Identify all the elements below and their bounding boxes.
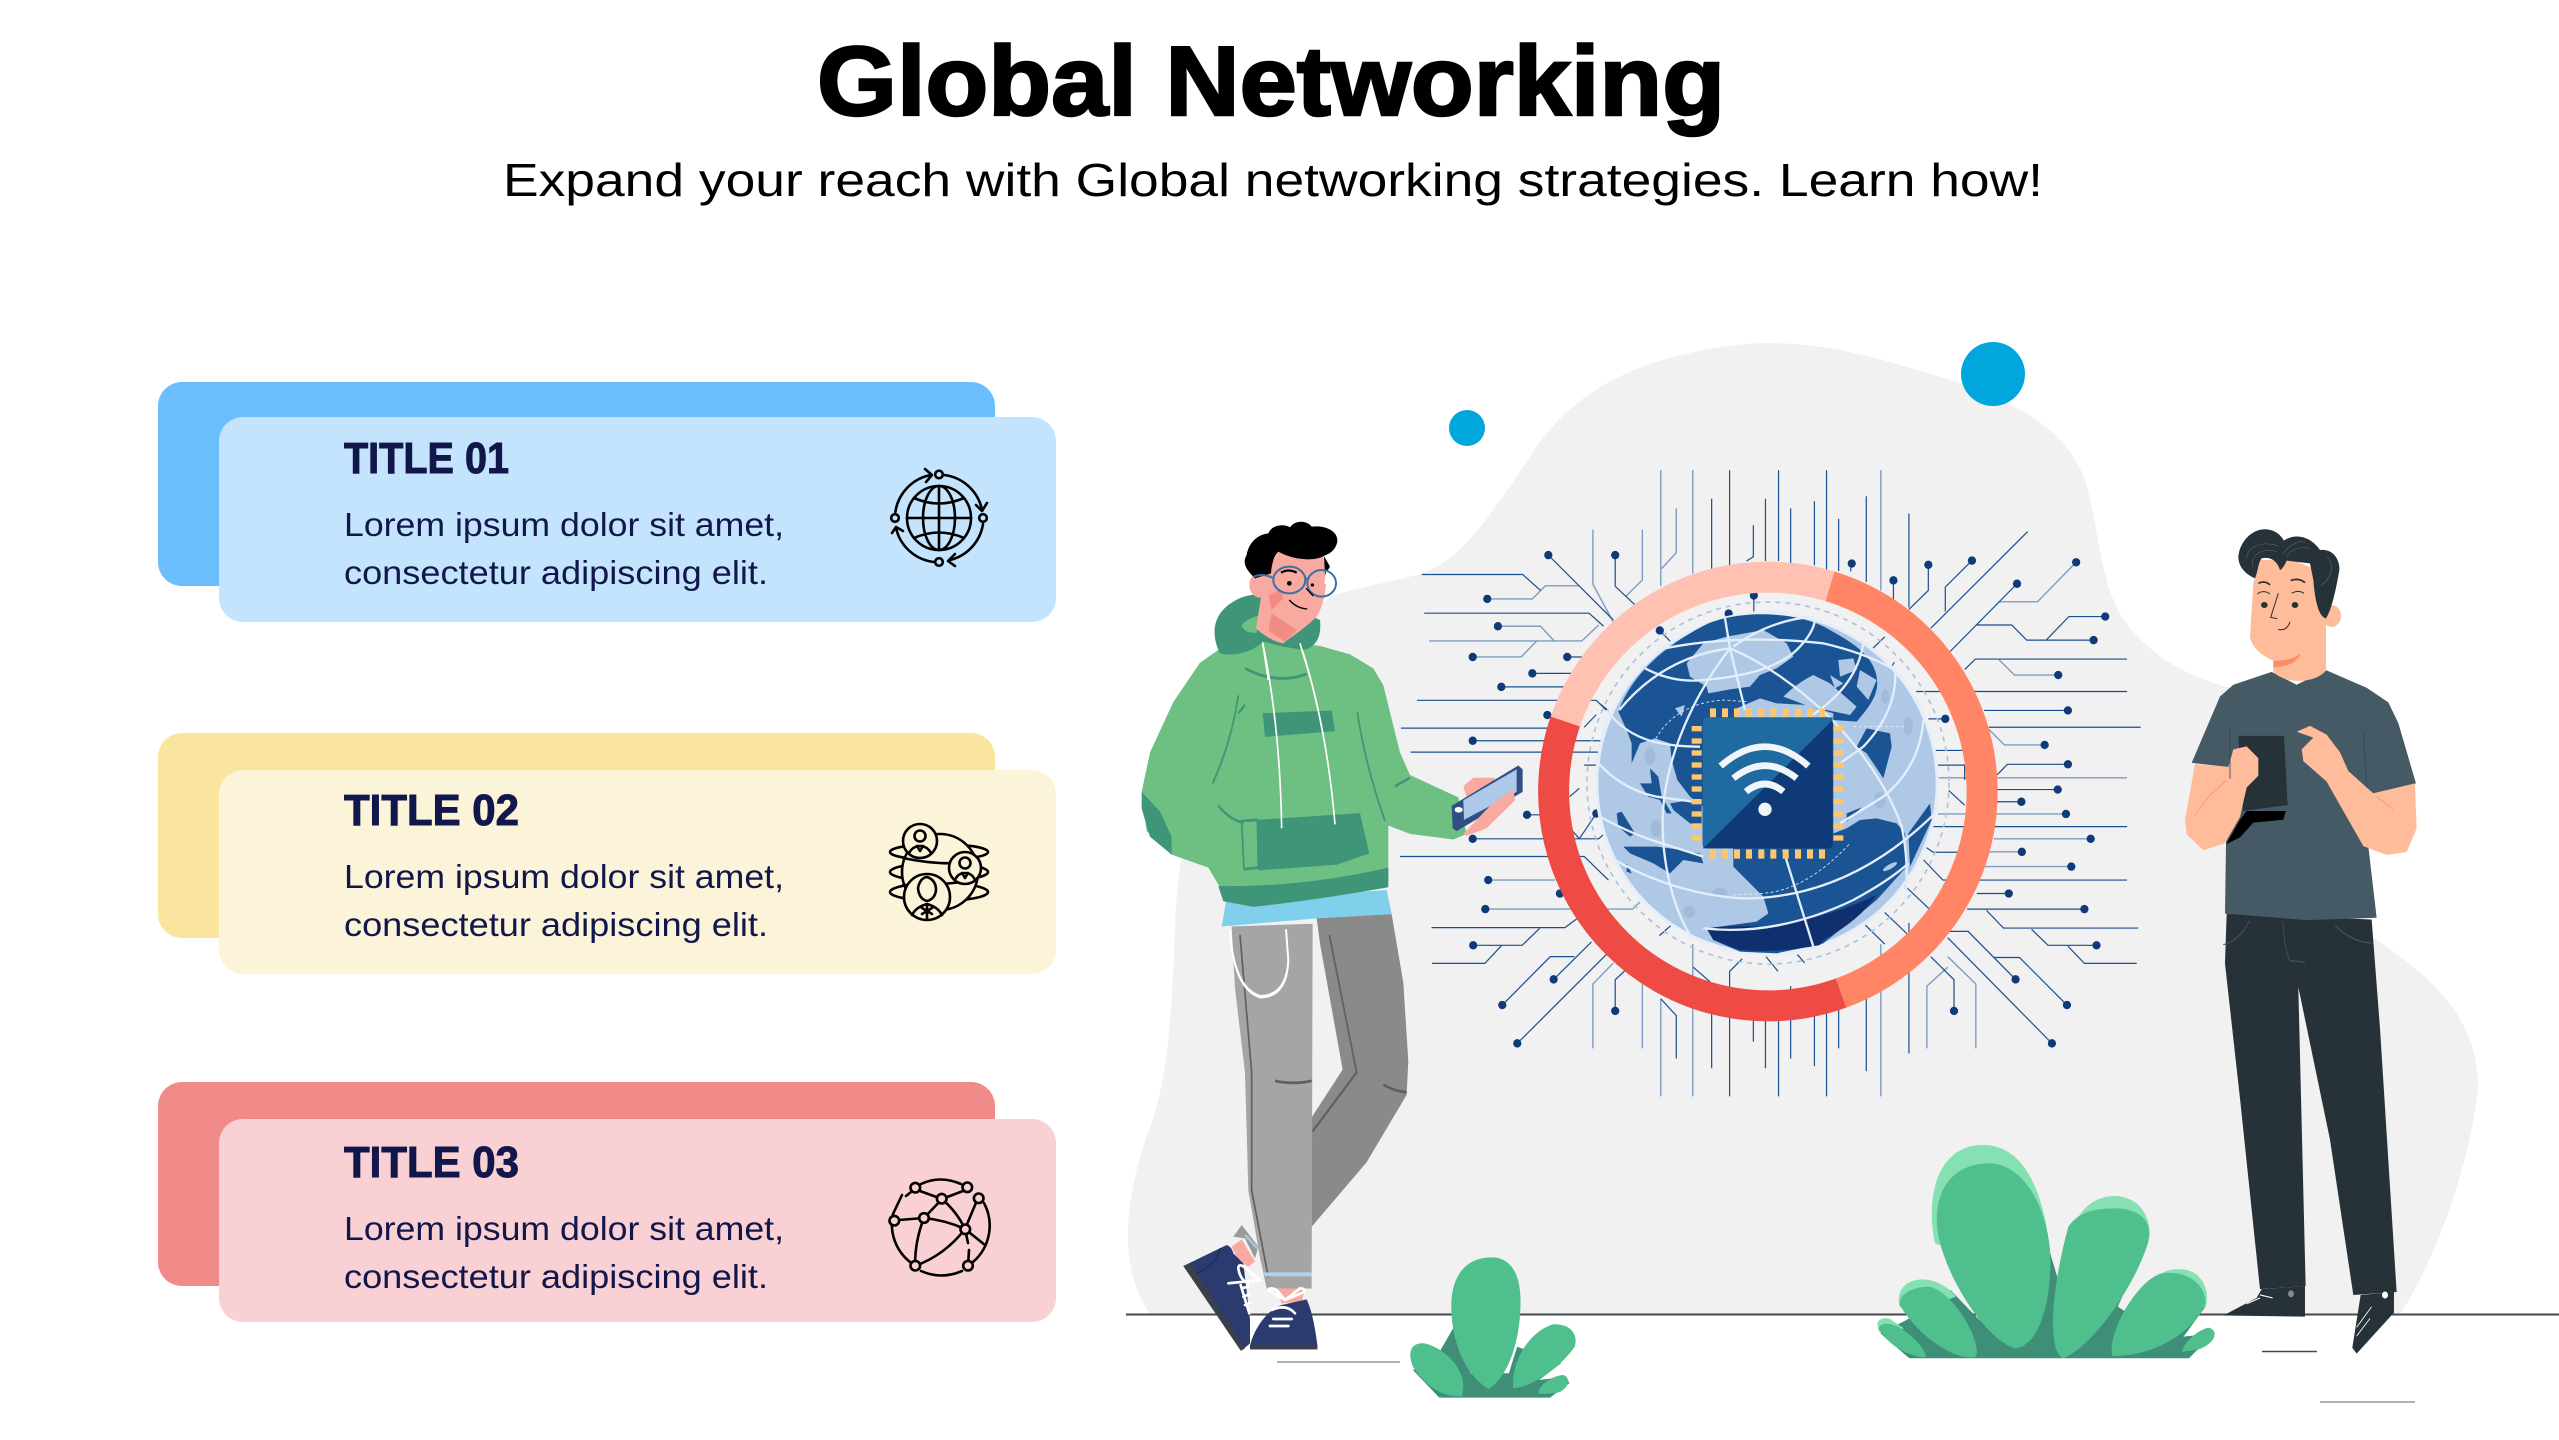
hoodie <box>1142 640 1467 901</box>
man in t-shirt: head <box>2238 529 2341 681</box>
arms <box>2185 746 2258 850</box>
progress ring <box>1554 577 1982 1006</box>
panel: card 02 <box>158 733 1056 974</box>
back leg <box>1312 914 1408 1227</box>
plant: large <box>1877 1145 2215 1358</box>
globe south shade <box>1707 895 1877 951</box>
decorative dot small <box>1449 410 1485 446</box>
circuit board traces <box>1400 470 2141 1096</box>
icon: globe with arrows <box>891 469 987 566</box>
dashed orbit <box>1587 602 1949 964</box>
icon: people around globe <box>890 824 988 920</box>
card 03 text: consectetur adipiscing elit. <box>344 1258 768 1295</box>
card 02 text: Lorem ipsum dolor sit amet, <box>344 858 784 895</box>
globe dark oceans <box>1617 614 1932 953</box>
background blob <box>1128 343 2478 1314</box>
card 03 text <box>344 1210 784 1295</box>
man with hoodie: head <box>1215 522 1337 680</box>
card 02 text: consectetur adipiscing elit. <box>344 906 768 943</box>
card 03 heading: TITLE 03 <box>344 1138 519 1187</box>
front leg <box>1232 924 1313 1288</box>
panel: card 03 <box>158 1082 1056 1322</box>
shoes <box>2223 1286 2305 1317</box>
card 03 text: Lorem ipsum dolor sit amet, <box>344 1210 784 1247</box>
panel: card 01 <box>158 382 1056 622</box>
card 02 text <box>344 858 784 943</box>
globe grid lines <box>1597 617 1935 947</box>
tablet <box>2238 736 2288 811</box>
man with hoodie: shoes <box>1183 1225 1317 1351</box>
card 01 text: consectetur adipiscing elit. <box>344 554 768 591</box>
globe light landmasses <box>1675 630 1898 873</box>
card 02 heading: TITLE 02 <box>344 786 519 835</box>
globe with chip <box>1595 611 1939 955</box>
plant: small <box>1410 1257 1576 1398</box>
card 01 text: Lorem ipsum dolor sit amet, <box>344 506 784 543</box>
globe storms <box>1645 689 1913 918</box>
card 01 heading: TITLE 01 <box>344 434 509 483</box>
person: man with hoodie and phone <box>1142 640 1523 1288</box>
subtitle: Expand your reach with Global networking strategies. Learn how! <box>503 154 2043 206</box>
icon: network sphere <box>890 1180 990 1276</box>
decorative dot large <box>1961 342 2025 406</box>
icon: wifi <box>1721 747 1808 792</box>
ground lines <box>1126 1314 2559 1402</box>
card 01 text <box>344 506 784 591</box>
title: Global Networking <box>817 26 1725 136</box>
phone in hand <box>1463 778 1495 797</box>
shirt hem <box>1222 890 1392 927</box>
earphone cable <box>1230 929 1288 997</box>
chip <box>1692 708 1843 859</box>
trousers <box>2225 914 2397 1295</box>
t-shirt <box>2192 670 2416 920</box>
person: man in grey t-shirt with tablet <box>2185 670 2417 1354</box>
